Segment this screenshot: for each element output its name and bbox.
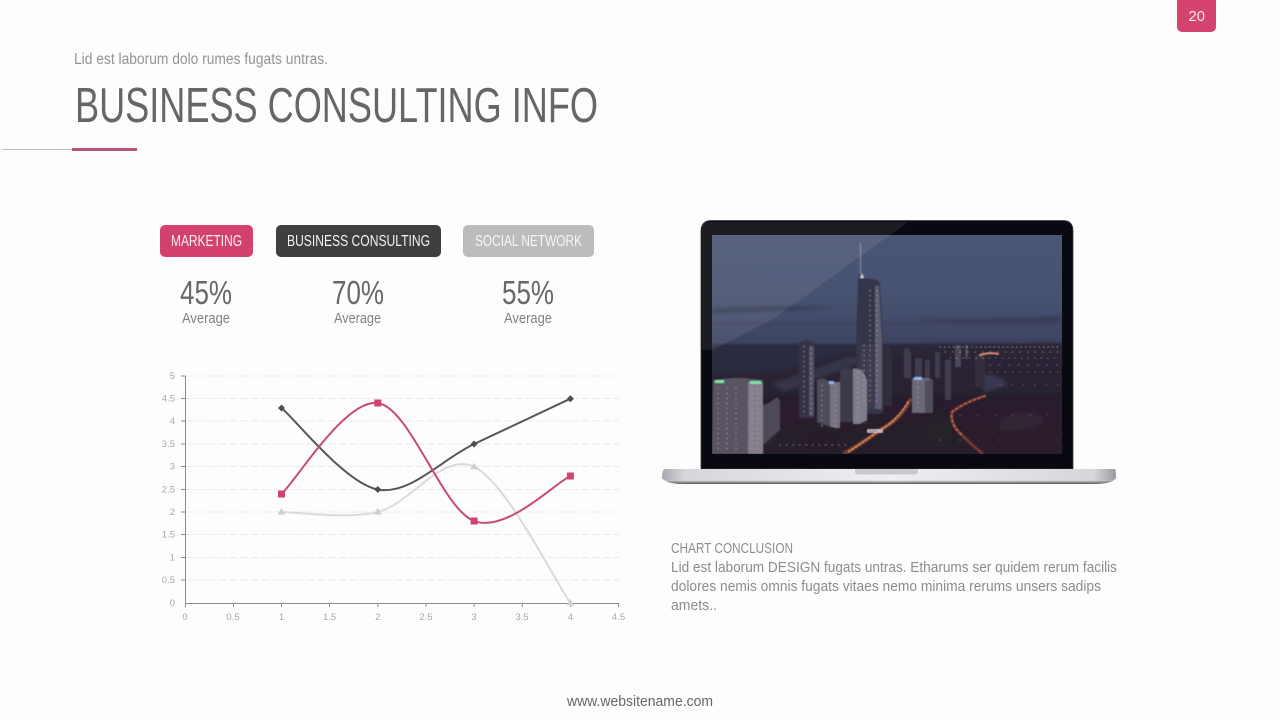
chart conclusion: CHART CONCLUSION [671, 540, 793, 557]
laptop base [662, 469, 1116, 484]
y axis labels: 1 [170, 552, 175, 564]
y axis labels: 2.5 [162, 484, 175, 496]
x axis labels: 0 [182, 612, 188, 623]
laptop mockup [662, 220, 1116, 484]
y axis labels: 2 [170, 507, 175, 518]
buildings [860, 243, 861, 279]
y axis labels: 4 [170, 416, 175, 427]
page number badge [1177, 0, 1216, 32]
x axis labels: 4 [568, 612, 573, 623]
legend: business consulting [276, 225, 441, 257]
stat: social network 55% [502, 274, 554, 327]
y axis labels: 0 [170, 598, 175, 609]
stat: business consulting 70%: 70% [332, 274, 384, 311]
x axis labels: 3.5 [515, 612, 529, 623]
stat: marketing 45%: Average [182, 310, 230, 327]
series: marketing [278, 400, 574, 524]
stat: social network 55%: Average [504, 310, 552, 327]
legend: marketing [160, 225, 253, 257]
photo: city skyline at dusk [712, 235, 1062, 454]
x axis labels: 0.5 [226, 612, 240, 623]
series: social network [278, 463, 574, 606]
x axis labels: 4.5 [612, 612, 625, 623]
title: BUSINESS CONSULTING INFO [75, 79, 598, 133]
legend: marketing: MARKETING [171, 233, 242, 250]
y axis labels: 4.5 [162, 394, 175, 404]
x axis labels: 1.5 [323, 612, 336, 623]
rooftop lights [715, 380, 761, 384]
stat: marketing 45% [180, 274, 232, 327]
chart conclusion: dolores nemis omnis fugats vitaes nemo minima rerums unsers sadips [671, 578, 1101, 595]
x axis labels: 2.5 [419, 612, 433, 623]
page number badge: 20 [1188, 8, 1205, 25]
footer url: www.websitename.com [566, 694, 713, 710]
x axis labels: 1 [279, 612, 284, 623]
chart conclusion: amets.. [671, 597, 717, 614]
y axis labels: 3.5 [162, 439, 175, 450]
y axis labels [162, 371, 175, 609]
chart conclusion: Lid est laborum DESIGN fugats untras. Etharums ser quidem rerum facilis [671, 559, 1117, 576]
stat: social network 55%: 55% [502, 274, 554, 311]
y axis labels: 5 [170, 371, 175, 382]
y axis labels: 3 [170, 462, 175, 472]
stat: marketing 45%: 45% [180, 274, 232, 311]
y axis labels: 1.5 [162, 530, 175, 540]
city lights [780, 347, 1060, 445]
chart conclusion [671, 540, 1117, 614]
window lights [718, 290, 918, 452]
stat: business consulting 70% [332, 274, 384, 327]
y axis labels: 0.5 [162, 575, 175, 586]
legend: social network [463, 225, 594, 257]
screen glare [702, 222, 908, 350]
subtitle: Lid est laborum dolo rumes fugats untras. [74, 51, 328, 68]
x axis labels: 2 [375, 612, 380, 623]
legend: business consulting: BUSINESS CONSULTING [287, 233, 430, 250]
line chart [162, 371, 625, 623]
series: business consulting [278, 395, 574, 493]
dark low-rise mass [762, 412, 974, 454]
stat: business consulting 70%: Average [334, 310, 381, 327]
laptop lid [701, 220, 1073, 469]
title underline [2, 148, 137, 151]
glowing roads [845, 353, 998, 453]
x axis labels [182, 612, 625, 623]
legend: social network: SOCIAL NETWORK [475, 233, 582, 250]
x axis labels: 3 [471, 612, 477, 623]
